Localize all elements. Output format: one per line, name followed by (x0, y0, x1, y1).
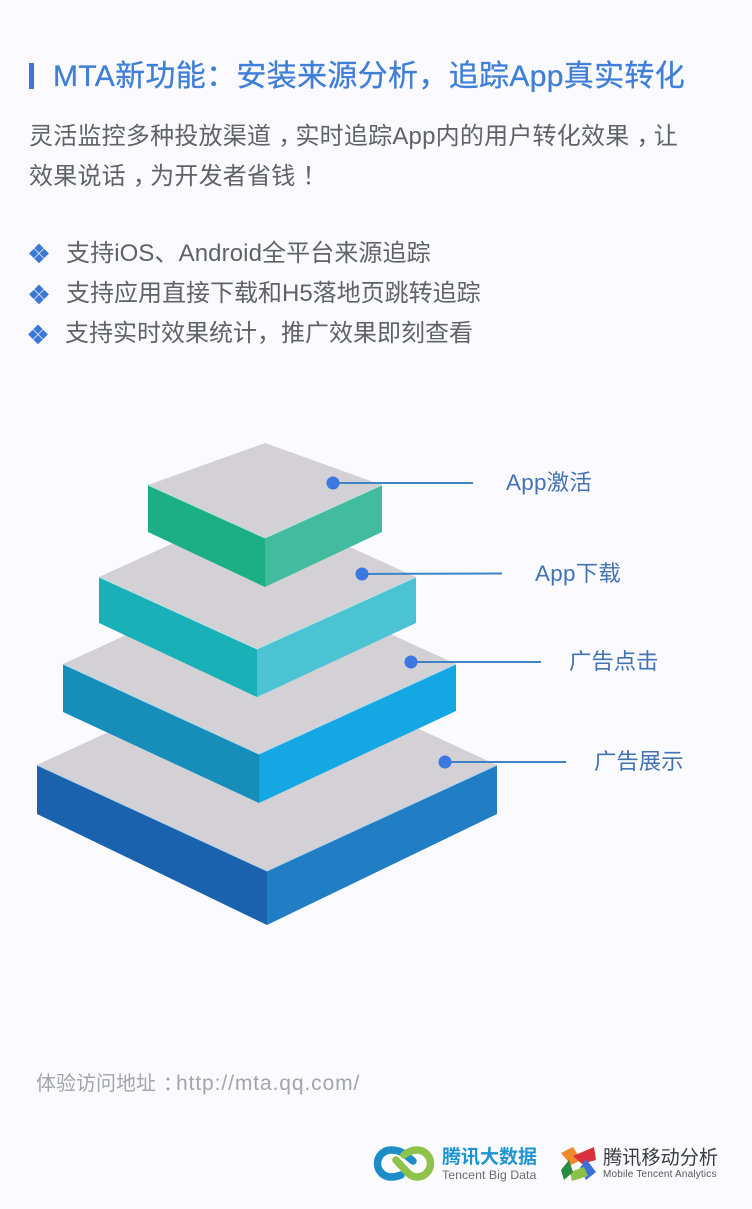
icon: infinity rings (374, 1146, 434, 1181)
callout line: ad clicks (404, 656, 541, 668)
callout line: app activations (326, 476, 473, 490)
bullet 3: 支持实时效果统计，推广效果即刻查看 (65, 320, 473, 347)
intro text: 灵活监控多种投放渠道 ，实时追踪App内的用户转化效果 ，让 (29, 123, 678, 150)
layer 2: app downloads (99, 505, 416, 697)
bullet 1: 支持iOS、Android全平台来源追踪 (66, 240, 431, 267)
logo: Tencent Big Data (374, 1146, 537, 1182)
callout line: ad impressions (438, 756, 566, 768)
label: ad clicks: 广告点击 (569, 649, 659, 674)
brand subtitle: Mobile Tencent Analytics (603, 1169, 717, 1180)
title bar accent (29, 63, 34, 89)
footer url: 体验访问地址 ：http://mta.qq.com/ (36, 1072, 360, 1095)
bullet list (65, 240, 481, 347)
label: app downloads: App下载 (535, 561, 621, 586)
logo: Mobile Tencent Analytics (561, 1147, 718, 1181)
layer 4: ad impressions (37, 659, 497, 925)
intro text (29, 123, 678, 190)
bullet 2: 支持应用直接下载和H5落地页跳转追踪 (66, 280, 481, 307)
brand subtitle: Tencent Big Data (442, 1168, 536, 1182)
icon: pinwheel star (561, 1147, 596, 1181)
bullet icons (28, 244, 49, 344)
layer 1: app activations (148, 443, 382, 587)
callout line: app downloads (356, 568, 502, 580)
intro text: 效果说话 ，为开发者省钱 ！ (29, 163, 327, 190)
label: ad impressions: 广告展示 (594, 749, 684, 774)
layer 3: ad clicks (63, 574, 456, 803)
title: MTA新功能：安装来源分析，追踪App真实转化 (53, 60, 685, 93)
brand name: 腾讯移动分析 (603, 1148, 718, 1169)
label: app activations: App激活 (506, 470, 592, 495)
brand name: 腾讯大数据 (442, 1147, 537, 1168)
